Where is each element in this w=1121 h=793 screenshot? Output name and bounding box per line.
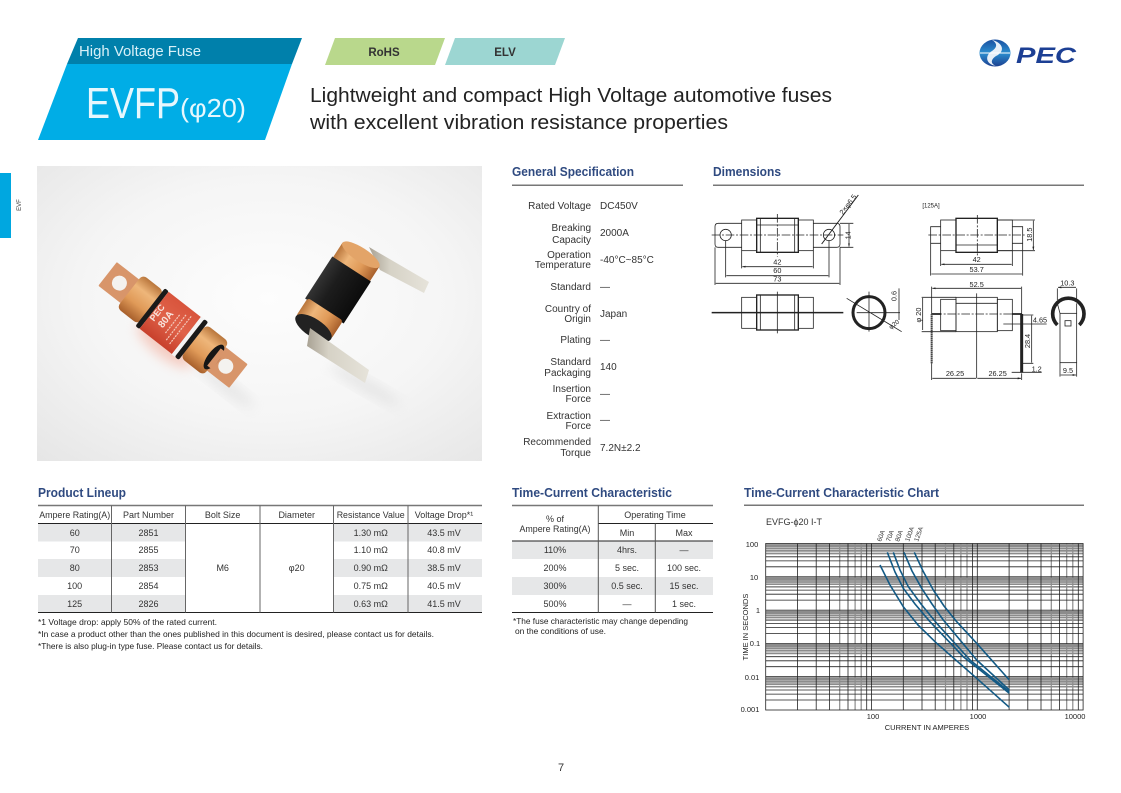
drawing: 125A side view: 1.2 xyxy=(1032,364,1042,373)
photo: black fuse with blade tabs xyxy=(289,236,429,383)
badge: RoHS xyxy=(325,38,445,65)
panel: general specification: Plating xyxy=(560,335,591,346)
chart: log-log I-T curves: 0.001 xyxy=(741,705,759,714)
title block: High Voltage Fuse EVFP xyxy=(38,38,302,140)
panel: product lineup table: 0.75 mΩ xyxy=(354,581,388,591)
product lineup footnotes: *There is also plug-in type fuse. Please contact us for details. xyxy=(38,641,263,651)
panel: product lineup table: 41.5 mV xyxy=(427,599,461,609)
panel: time-current characteristic table: 5 sec. xyxy=(615,563,639,573)
panel: general specification: Force xyxy=(565,421,591,432)
chart: log-log I-T curves: 100 xyxy=(746,540,758,549)
chart: log-log I-T curves: 125A xyxy=(913,525,925,543)
panel: time-current characteristic table: 200% xyxy=(543,563,567,573)
badge: ELV xyxy=(445,38,565,65)
panel: time-current characteristic table: 100 sec. xyxy=(667,563,701,573)
panel: product lineup table: Diameter xyxy=(278,510,315,520)
panel: product lineup table: 125 xyxy=(67,599,82,609)
panel: product lineup table: 38.5 mV xyxy=(427,563,461,573)
panel: general specification: Japan xyxy=(600,309,627,320)
panel: general specification: — xyxy=(600,335,610,346)
drawing: bolt fuse top view: 73 xyxy=(773,275,781,284)
panel: time-current characteristic table: 4hrs. xyxy=(617,545,637,555)
side tab: EVF xyxy=(0,173,23,238)
photo: copper and red fuse: PEC xyxy=(148,302,167,323)
chart: log-log I-T curves: 80A xyxy=(894,529,905,543)
panel: product lineup table: Ampere Rating(A) xyxy=(39,510,110,520)
panel: product lineup table xyxy=(38,486,482,612)
panel: product lineup table: φ20 xyxy=(289,563,305,573)
panel: product lineup table: 40.8 mV xyxy=(427,545,461,555)
panel: general specification: — xyxy=(600,415,610,426)
panel: general specification: 140 xyxy=(600,362,617,373)
page number: 7 xyxy=(558,762,564,774)
panel: general specification: — xyxy=(600,282,610,293)
drawing: 125A side view: 26.25 xyxy=(946,369,964,378)
panel: product lineup table: 1.10 mΩ xyxy=(354,545,388,555)
panel: time-current characteristic table: 15 sec. xyxy=(669,581,699,591)
chart: log-log I-T curves: 0.1 xyxy=(750,639,760,648)
drawing: 125A side view: 52.5 xyxy=(970,280,984,289)
panel: general specification: Rated Voltage xyxy=(528,201,591,212)
tagline xyxy=(309,85,832,134)
panel: product lineup table: 2855 xyxy=(138,545,159,555)
panel: general specification: Standard xyxy=(550,282,591,293)
drawing: bolt fuse top view xyxy=(712,192,859,285)
title block: High Voltage Fuse EVFP: High Voltage Fuse xyxy=(79,43,201,60)
panel: general specification: Force xyxy=(565,394,591,405)
panel: time-current characteristic table: 300% xyxy=(543,581,567,591)
logo: PEC xyxy=(980,40,1077,68)
panel: product lineup table: Product Lineup xyxy=(38,486,126,500)
panel: general specification xyxy=(512,165,683,459)
dimension drawings xyxy=(712,192,1084,380)
chart: log-log I-T curves: CURRENT IN AMPERES xyxy=(885,723,969,732)
panel: time-current characteristic table: Operating Time xyxy=(624,510,686,520)
drawing: bolt fuse side view: 0.6 xyxy=(890,291,899,301)
drawing: 125A side view xyxy=(914,280,1047,380)
panel: general specification: -40°C~85°C xyxy=(600,255,654,266)
product lineup footnotes: *In case a product other than the ones published in this document is desired, please contact us for details. xyxy=(38,629,434,639)
tagline: Lightweight and compact High Voltage automotive fuses xyxy=(310,85,832,107)
panel: dimensions xyxy=(712,165,1084,380)
drawing: 125A side view: 4.65 xyxy=(1033,316,1047,325)
panel: product lineup table: Resistance Value xyxy=(337,510,405,520)
badge: RoHS: RoHS xyxy=(368,47,400,59)
drawing: bolt fuse top view: 60 xyxy=(773,266,781,275)
chart: log-log I-T curves: 60A xyxy=(876,529,887,543)
panel: time-current characteristic table: % of xyxy=(546,514,565,524)
chart: log-log I-T curves: 100A xyxy=(904,525,916,543)
panel: time-current characteristic chart xyxy=(741,486,1085,732)
panel: product lineup table: 60 xyxy=(70,528,80,538)
time-current footnote: *The fuse characteristic may change depending xyxy=(513,616,688,626)
panel: time-current characteristic table: 500% xyxy=(543,599,567,609)
panel: time-current characteristic table: Ampere Rating(A) xyxy=(520,524,590,534)
panel: time-current characteristic table: Time-Current Characteristic xyxy=(512,486,672,500)
panel: product lineup table: Voltage Drop*¹ xyxy=(415,510,473,520)
drawing: bolt fuse side view: φ20 xyxy=(888,318,901,331)
panel: general specification: Torque xyxy=(560,448,591,459)
panel: time-current characteristic table xyxy=(512,486,713,612)
panel: general specification: Packaging xyxy=(544,368,591,379)
logo: PEC: PEC xyxy=(1016,43,1077,68)
title block: High Voltage Fuse EVFP: (φ20) xyxy=(180,93,246,123)
drawing: 125A end view: 9.5 xyxy=(1063,366,1073,375)
drawing: bolt fuse top view: 42 xyxy=(773,257,781,266)
panel: product lineup table: Part Number xyxy=(123,510,174,520)
drawing: 125A top view xyxy=(922,204,1035,276)
drawing: 125A end view: 10.3 xyxy=(1060,279,1074,288)
panel: time-current characteristic table: 110% xyxy=(544,545,566,555)
drawing: 125A top view: 42 xyxy=(973,255,981,264)
panel: product lineup table: 80 xyxy=(70,563,80,573)
panel: general specification: Temperature xyxy=(535,260,591,271)
panel: general specification: DC450V xyxy=(600,201,638,212)
panel: product lineup table: 0.63 mΩ xyxy=(354,599,388,609)
panel: general specification: Standard xyxy=(550,357,591,368)
drawing: 125A top view: [125A] xyxy=(922,204,940,210)
panel: product lineup table: Bolt Size xyxy=(205,510,240,520)
panel: general specification: Breaking xyxy=(552,223,591,234)
panel: general specification: 7.2N±2.2 xyxy=(600,443,641,454)
panel: general specification: 2000A xyxy=(600,228,629,239)
panel: product lineup table: M6 xyxy=(216,563,229,573)
time-current footnote xyxy=(513,616,688,636)
panel: time-current characteristic table: — xyxy=(622,599,632,609)
panel: general specification: Origin xyxy=(564,314,591,325)
drawing: bolt fuse top view: 14 xyxy=(844,231,853,239)
panel: product lineup table: 2853 xyxy=(138,563,159,573)
chart: log-log I-T curves: 1 xyxy=(756,606,760,615)
chart: log-log I-T curves: 10000 xyxy=(1065,712,1085,721)
drawing: 125A top view: 53.7 xyxy=(970,265,984,274)
product photo xyxy=(37,166,482,461)
panel: product lineup table: 100 xyxy=(67,581,82,591)
drawing: 125A end view xyxy=(1053,279,1084,377)
panel: product lineup table: 40.5 mV xyxy=(427,581,461,591)
panel: product lineup table: 2826 xyxy=(138,599,159,609)
panel: time-current characteristic table: 1 sec. xyxy=(672,599,696,609)
title block: High Voltage Fuse EVFP: EVFP xyxy=(86,79,180,128)
panel: dimensions: Dimensions xyxy=(713,165,781,179)
panel: general specification: Insertion xyxy=(553,384,591,395)
panel: product lineup table: 2854 xyxy=(138,581,159,591)
panel: product lineup table: 43.5 mV xyxy=(427,528,461,538)
side tab: EVF: EVF xyxy=(17,199,23,211)
badge: ELV: ELV xyxy=(494,47,516,59)
panel: general specification: — xyxy=(600,389,610,400)
panel: product lineup table: 2851 xyxy=(138,528,159,538)
panel: general specification: Operation xyxy=(547,250,591,261)
product lineup footnotes: *1 Voltage drop: apply 50% of the rated current. xyxy=(38,617,217,627)
drawing: 125A side view: 28.4 xyxy=(1023,334,1032,348)
panel: general specification: Capacity xyxy=(552,235,591,246)
product lineup footnotes xyxy=(38,617,434,651)
panel: time-current characteristic table: 0.5 sec. xyxy=(611,581,643,591)
panel: general specification: Country of xyxy=(545,304,591,315)
chart: log-log I-T curves: 0.01 xyxy=(745,673,759,682)
chart: log-log I-T curves: 70A xyxy=(885,529,896,543)
panel: time-current characteristic chart: EVFG-ϕ20 I-T xyxy=(766,517,823,527)
panel: general specification: Recommended xyxy=(523,437,591,448)
drawing: bolt fuse side view xyxy=(712,288,902,333)
panel: general specification: Extraction xyxy=(547,411,591,422)
time-current footnote: on the conditions of use. xyxy=(515,626,606,636)
drawing: 125A side view: 26.25 xyxy=(988,369,1007,378)
panel: product lineup table: 70 xyxy=(70,545,80,555)
photo: copper and red fuse xyxy=(93,255,253,395)
panel: time-current characteristic table: — xyxy=(680,545,688,555)
chart: log-log I-T curves: TIME IN SECONDS xyxy=(741,594,750,660)
chart: log-log I-T curves xyxy=(741,525,1085,732)
drawing: 125A top view: 18.5 xyxy=(1025,228,1034,242)
panel: general specification: General Specification xyxy=(512,165,634,179)
drawing: bolt fuse top view: 2×φ6.5 xyxy=(837,192,859,217)
panel: product lineup table: 0.90 mΩ xyxy=(354,563,388,573)
drawing: 125A side view: φ 20 xyxy=(914,308,923,322)
chart: log-log I-T curves: 10 xyxy=(750,573,758,582)
panel: time-current characteristic chart: Time-Current Characteristic Chart xyxy=(744,486,940,500)
chart: log-log I-T curves: 100 xyxy=(867,712,879,721)
chart: log-log I-T curves: 1000 xyxy=(970,712,986,721)
photo: copper and red fuse: 80A xyxy=(156,309,176,330)
panel: product lineup table: 1.30 mΩ xyxy=(354,528,388,538)
panel: time-current characteristic table: Min xyxy=(620,528,634,538)
tagline: with excellent vibration resistance properties xyxy=(309,112,728,134)
panel: time-current characteristic table: Max xyxy=(675,528,693,538)
